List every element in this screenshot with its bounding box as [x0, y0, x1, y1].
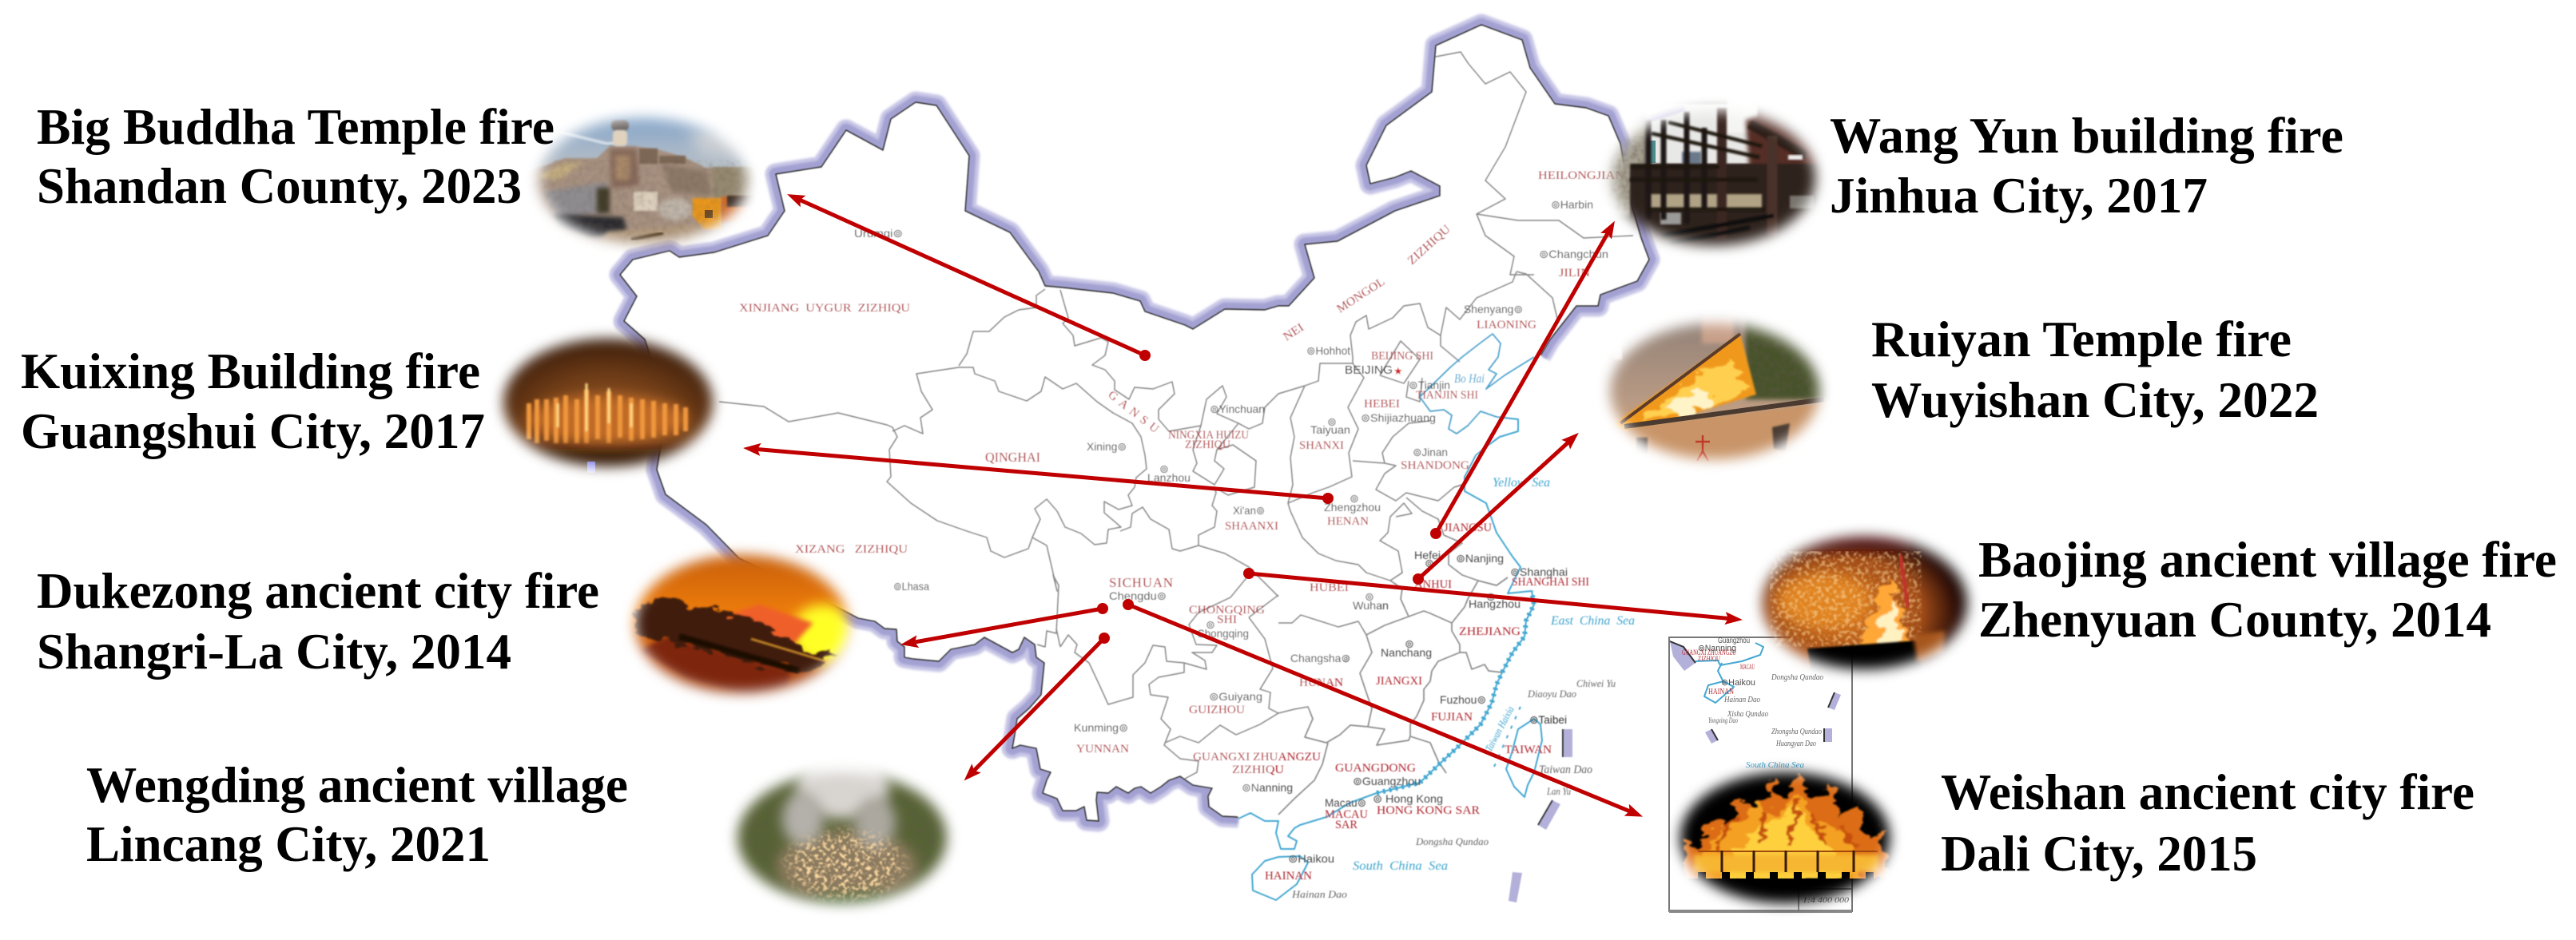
sea and island labels: Taiwan Dao	[1539, 764, 1592, 776]
city labels: ⊚Haikou	[1288, 852, 1334, 865]
province labels: ZHEJIANG	[1459, 625, 1521, 638]
city labels: ⊚Lhasa	[893, 580, 929, 593]
city labels: ⊚	[1425, 557, 1434, 569]
text: Wang Yun building fire: Wang Yun building fire	[1830, 108, 2343, 164]
text: Kuixing Building fire	[21, 343, 485, 459]
inset labels: Huangyan Dao	[1775, 740, 1816, 748]
city labels: Urumqi⊚	[854, 227, 903, 240]
province labels: CHONGQING	[1189, 604, 1265, 617]
inset labels: ⊚Nanning	[1698, 644, 1736, 653]
province labels: BEIJING SHI	[1371, 350, 1433, 363]
photo: Wang Yun building fire	[1603, 101, 1826, 256]
city labels	[854, 198, 1608, 865]
province labels	[739, 169, 1634, 882]
inset labels: Yongxing Dao	[1708, 716, 1738, 724]
province labels: HUNAN	[1299, 676, 1343, 689]
city labels: ⊚Harbin	[1551, 198, 1593, 211]
province labels: SICHUAN	[1109, 575, 1173, 590]
city labels: Nanchang	[1381, 646, 1432, 659]
inset labels: Zhongsha Qundao	[1771, 728, 1822, 736]
text: Kuixing Building fire: Kuixing Building fire	[21, 343, 480, 399]
city labels: Changsha⊚	[1290, 652, 1350, 664]
city labels: ⊚	[1350, 492, 1359, 505]
city labels: Lanzhou	[1147, 471, 1191, 484]
text: Ruiyan Temple fire: Ruiyan Temple fire	[1871, 311, 2292, 367]
text: Ruiyan Temple fire: Wuyishan City, 2022	[1871, 372, 2319, 428]
province labels: ZIZHIQU	[1232, 764, 1284, 776]
text: Weishan ancient city fire	[1941, 764, 2475, 882]
province labels: YUNNAN	[1076, 743, 1129, 756]
province labels: SAR	[1335, 819, 1358, 831]
inset labels: Hainan Dao	[1723, 696, 1760, 704]
arrow: Weishan ancient city	[1123, 599, 1634, 813]
city labels: Shenyang⊚	[1464, 303, 1523, 315]
inset labels: ⊚Haikou	[1721, 678, 1755, 688]
arrow: Big Buddha Temple	[796, 198, 1151, 361]
city labels: ⊚	[1159, 462, 1169, 475]
text: Kuixing Building fire: Guangshui City, 2017	[21, 403, 485, 459]
province labels: MACAU	[1325, 808, 1368, 821]
city labels: Kunming⊚	[1074, 721, 1128, 734]
city labels: ⊚Yinchuan	[1210, 403, 1265, 415]
city labels: ⊚	[1327, 415, 1337, 428]
text: Wang Yun building fire: Jinhua City, 2017	[1830, 168, 2208, 224]
city labels: Hangzhou	[1469, 597, 1521, 610]
city labels: ⊚Hohhot	[1306, 344, 1350, 357]
city labels: ⊚Shanghai	[1510, 565, 1568, 578]
sea and island labels: Diaoyu Dao	[1527, 688, 1576, 700]
city labels: Xining⊚	[1087, 440, 1127, 453]
photo: Kuixing Building fire	[492, 327, 724, 478]
text: Big Buddha Temple fire: Big Buddha Temple fire	[37, 99, 555, 155]
province labels: TAIWAN	[1505, 744, 1552, 756]
arrow: Dukezong ancient city	[910, 603, 1108, 643]
city labels: Zhengzhou	[1324, 501, 1381, 514]
province labels: GANSU	[1106, 389, 1165, 438]
inset map: South China Sea	[1669, 637, 1852, 911]
inset labels: HAINAN	[1708, 688, 1734, 696]
arrow: Baojing ancient village	[1243, 568, 1733, 619]
inset labels: GUANGXI ZHUANGZU	[1682, 648, 1736, 656]
city labels: ⊚Nanjing	[1456, 552, 1504, 565]
province labels: XINJIANG UYGUR ZIZHIQU	[739, 302, 910, 315]
city labels: ⊚Guiyang	[1209, 690, 1262, 703]
province labels: QINGHAI	[985, 450, 1040, 465]
province labels: HEBEI	[1364, 398, 1400, 411]
sea and island labels	[1291, 372, 1635, 900]
province labels: SHANDONG	[1401, 459, 1469, 472]
photo: Baojing ancient village fire	[1751, 526, 1978, 680]
province labels: HENAN	[1327, 515, 1369, 528]
city labels: Fuzhou⊚	[1440, 693, 1486, 706]
inset labels: Dongsha Qundao	[1771, 673, 1823, 682]
city labels: Taiyuan	[1310, 423, 1350, 436]
arrow: Wang Yun building	[1430, 229, 1610, 539]
text: Wengding ancient village	[86, 757, 628, 872]
province labels: LIAONING	[1477, 319, 1536, 331]
text: Baojing ancient village fire: Baojing ancient village fire	[1978, 532, 2557, 588]
province labels: ANHUI	[1414, 578, 1452, 591]
inset labels: 1:4 400 000	[1803, 896, 1850, 904]
photo: Big Buddha Temple fire	[531, 109, 756, 252]
province labels: GUANGDONG	[1335, 762, 1416, 775]
inset labels: South China Sea	[1746, 760, 1804, 770]
province labels: HONG KONG SAR	[1377, 804, 1480, 817]
city labels: ⊚Shijiazhuang	[1361, 411, 1436, 424]
sea and island labels: Yellow Sea	[1493, 476, 1550, 490]
province labels: SHANGHAI SHI	[1512, 576, 1589, 589]
arrow: Ruiyan Temple	[1413, 439, 1572, 585]
text: Dukezong ancient city fire: Shangri-La City, 2014	[37, 624, 511, 680]
photo: Weishan ancient city fire	[1670, 762, 1900, 914]
city labels: ⊚Taibei	[1529, 713, 1567, 726]
province labels: HEILONGJIANG	[1538, 169, 1634, 182]
province labels: HUBEI	[1310, 581, 1349, 594]
text: Dukezong ancient city fire: Dukezong ancient city fire	[37, 563, 599, 619]
sea and island labels: Taiwan Haixia	[1482, 704, 1517, 753]
city labels: Chongqing	[1197, 627, 1249, 640]
province labels: JIANGSU	[1444, 522, 1492, 534]
province labels: SHI	[1217, 613, 1237, 626]
city labels: Wuhan	[1353, 599, 1389, 612]
text: Big Buddha Temple fire	[37, 99, 555, 214]
city labels: ★	[1393, 366, 1403, 378]
province labels: SHAANXI	[1225, 520, 1278, 533]
arrow: Wengding ancient village	[971, 633, 1110, 774]
text: Dukezong ancient city fire	[37, 563, 599, 680]
photo: Ruiyan Temple fire	[1601, 315, 1829, 469]
city labels: BEIJING	[1345, 363, 1393, 377]
city labels: ⊚Jinan	[1413, 446, 1448, 458]
national border with purple shading	[620, 25, 1649, 821]
text: Weishan ancient city fire: Dali City, 2015	[1941, 826, 2257, 882]
text: Weishan ancient city fire: Weishan ancient city fire	[1941, 764, 2475, 820]
map of China	[620, 25, 1649, 902]
province labels: NINGXIA HUIZU	[1168, 429, 1249, 442]
city labels: ⊚Guangzhou	[1353, 775, 1421, 787]
province labels: GUIZHOU	[1189, 704, 1245, 716]
city labels: Macau⊚	[1325, 796, 1366, 809]
sea and island labels: Dongsha Qundao	[1415, 835, 1489, 847]
arrow: Kuixing Building	[753, 449, 1334, 504]
city labels: Hefei	[1414, 549, 1441, 561]
inset labels: Guangzhou	[1718, 637, 1750, 645]
city labels: Chengdu⊚	[1109, 589, 1167, 602]
inset labels	[1682, 637, 1850, 904]
province labels: MONGOL	[1334, 276, 1387, 315]
sea and island labels: East China Sea	[1550, 614, 1635, 628]
maritime boundary dashes	[1509, 729, 1572, 902]
text: Ruiyan Temple fire	[1871, 311, 2319, 428]
province labels: TIANJIN SHI	[1416, 389, 1478, 402]
sea and island labels: South China Sea	[1353, 859, 1448, 873]
province labels: NEI	[1281, 321, 1306, 343]
sea and island labels: Chiwei Yu	[1576, 677, 1616, 689]
province labels: SHANXI	[1299, 439, 1344, 452]
province labels: XIZANG ZIZHIQU	[795, 543, 908, 556]
province labels: ZIZHIQU	[1185, 438, 1230, 451]
city labels: ⊚	[1206, 618, 1215, 631]
province labels: ZIZHIQU	[1405, 223, 1453, 268]
inset labels: MACAU	[1740, 663, 1755, 671]
sea and island labels: Lan Yu	[1546, 785, 1571, 797]
text: Wengding ancient village: Lincang City, 2021	[86, 816, 491, 872]
text: Baojing ancient village fire	[1978, 532, 2557, 648]
photo: Dukezong ancient city fire	[625, 545, 858, 703]
text: Big Buddha Temple fire: Shandan County, 2023	[37, 158, 522, 214]
city labels: ⊚Changchun	[1539, 248, 1608, 260]
city labels: ⊚	[1405, 637, 1414, 650]
province labels: HAINAN	[1265, 870, 1312, 882]
province boundaries	[719, 52, 1633, 815]
sea and island labels: Bo Hai	[1454, 372, 1485, 386]
text: Wang Yun building fire	[1830, 108, 2343, 224]
province labels: GUANGXI ZHUANGZU	[1193, 751, 1321, 764]
province labels: JIANGXI	[1376, 675, 1422, 688]
city labels: Xi'an⊚	[1233, 504, 1265, 517]
city labels: ⊚	[1365, 590, 1374, 603]
coastline, rivers and islands	[1238, 334, 1542, 900]
inset labels: Xisha Qundao	[1727, 710, 1768, 719]
city labels: ⊚Nanning	[1242, 781, 1293, 794]
city labels: ⊚Tianjin	[1409, 379, 1450, 391]
inset labels: ZIZHIQU	[1698, 655, 1720, 662]
province labels: FUJIAN	[1431, 711, 1473, 724]
province labels: JILIN	[1559, 267, 1590, 280]
sea and island labels: Hainan Dao	[1291, 888, 1348, 900]
text: Wengding ancient village: Wengding ancient village	[86, 757, 628, 813]
city labels: ⊚ Hong Kong	[1373, 792, 1443, 805]
city labels: ⊚	[1486, 590, 1496, 603]
photo: Wengding ancient village fire	[727, 767, 957, 914]
text: Baojing ancient village fire: Zhenyuan County, 2014	[1978, 592, 2491, 648]
